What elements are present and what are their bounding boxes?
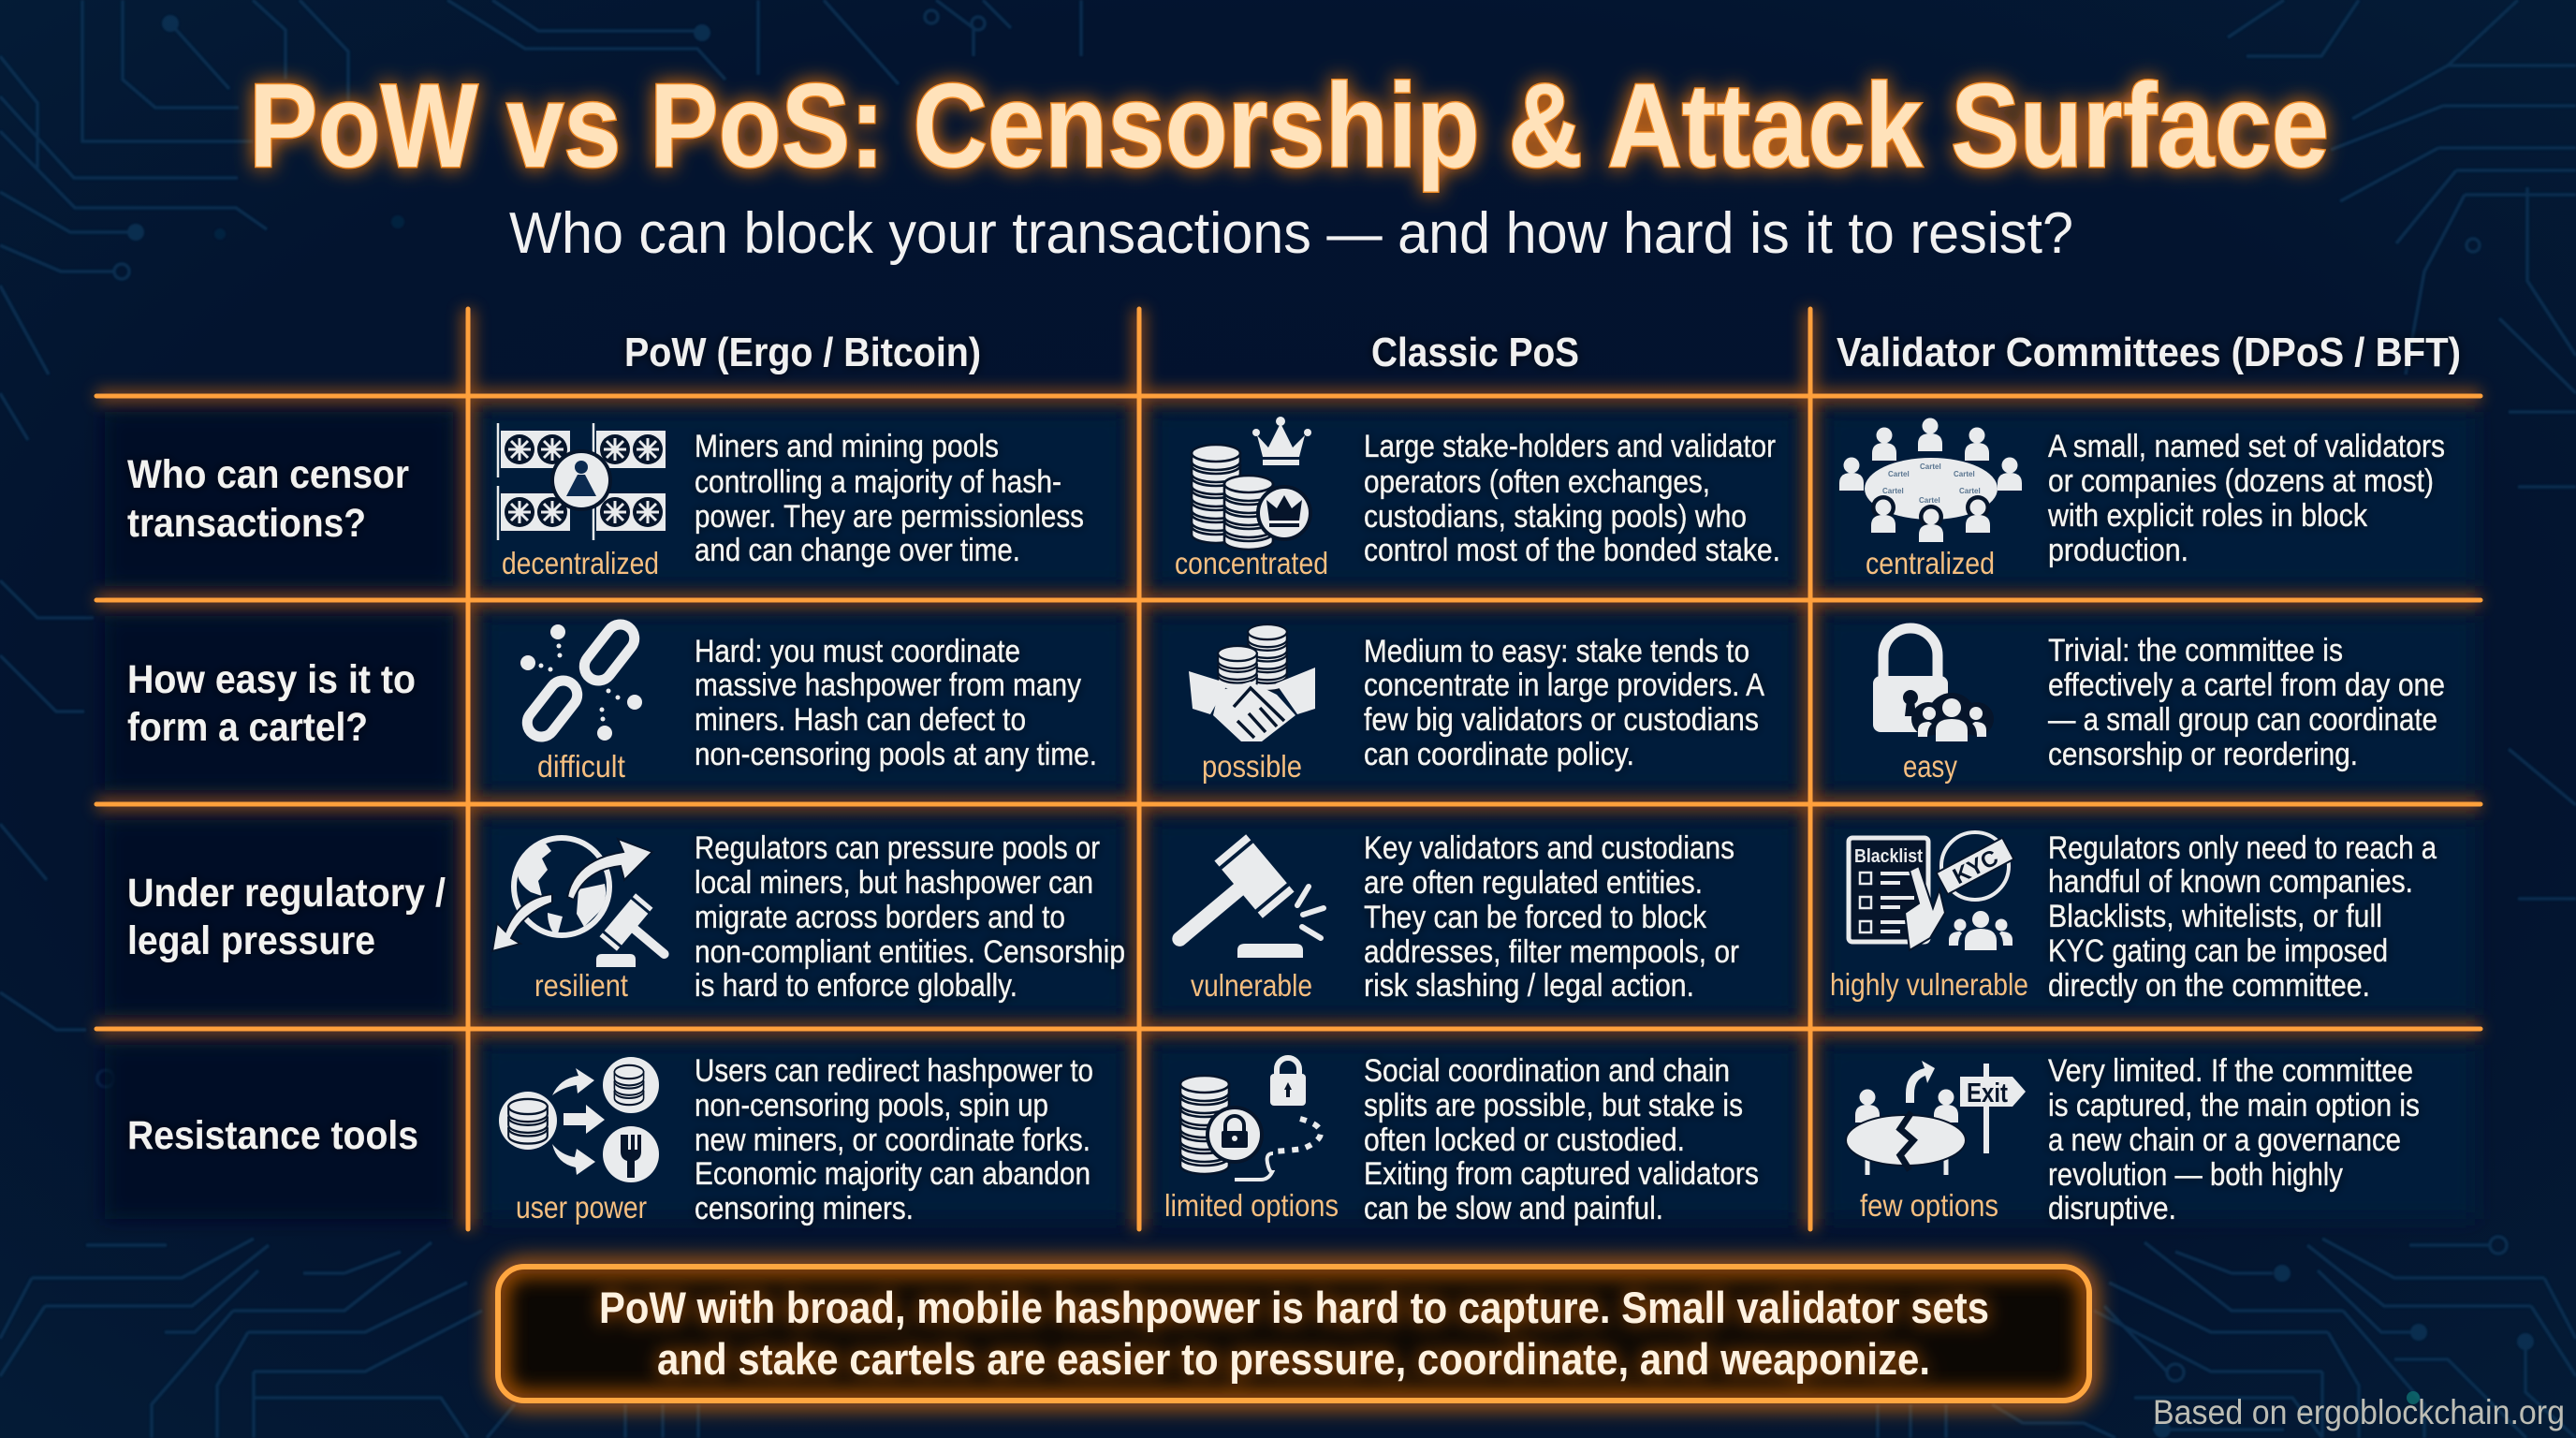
panel: PoW regulatory [492,830,1125,1004]
text: directly on the committee. [2048,968,2370,1004]
text: are often regulated entities. [1364,865,1703,901]
text: censorship or reordering. [2048,737,2358,772]
row labels: Resistance tools [127,1113,418,1158]
text [1364,634,1764,772]
text: concentrate in large providers. A [1364,668,1764,703]
text: Trivial: the committee is [2048,633,2343,668]
icon: broken chain [520,619,642,742]
row labels: legal pressure [127,918,375,963]
icon: committee around table: Cartel [1954,470,1975,478]
text: power. They are permissionless [695,499,1084,535]
text: A small, named set of validators [2048,429,2445,464]
text [695,830,1125,1004]
tag: vulnerable [1191,968,1312,1003]
tag: possible [1202,749,1302,784]
text: is captured, the main option is [2048,1088,2420,1123]
panel: Classic PoS cartel [1189,624,1764,784]
icon: gavel [1149,834,1324,973]
text [2048,830,2437,1004]
icon: globe with arrows and gavel [492,838,686,978]
panel: PoW who can censor [498,423,1084,580]
grid lines [96,309,2481,1229]
icon: committee around table: Cartel [1888,470,1910,478]
text: addresses, filter mempools, or [1364,934,1739,970]
icon: locked coins with dotted exit path [1180,1058,1321,1180]
text: miners. Hash can defect to [695,702,1026,738]
row labels [127,452,446,1158]
text: Users can redirect hashpower to [695,1053,1093,1089]
icon: committee around table: Cartel [1920,462,1941,471]
text [2048,633,2445,772]
panel: committees who can censor [1839,418,2445,580]
row labels: Under regulatory / [127,871,446,916]
text: operators (often exchanges, [1364,464,1710,500]
icon: committee around table: Cartel [1959,487,1981,495]
callout: conclusion box [498,1267,2089,1401]
text: control most of the bonded stake. [1364,533,1780,568]
text: new miners, or coordinate forks. [695,1123,1090,1158]
text: censoring miners. [695,1191,914,1226]
icon: blacklist, KYC stamp and group [1849,832,2014,950]
icon: broken table and exit sign: Exit [1967,1078,2008,1108]
column headers: PoW (Ergo / Bitcoin) [624,330,981,375]
text: and can change over time. [695,533,1020,568]
text: with explicit roles in block [2047,498,2368,534]
subtitle: Who can block your transactions — and how hard is it to resist? [509,201,2073,266]
text: revolution — both highly [2048,1157,2343,1193]
row labels: Who can censor [127,452,409,497]
tag: concentrated [1175,546,1328,580]
text: Exiting from captured validators [1364,1156,1759,1192]
text: non-compliant entities. Censorship [695,934,1125,970]
tag: user power [516,1190,647,1225]
text: local miners, but hashpower can [695,865,1093,901]
icon: committee around table [1839,418,2022,542]
icon: broken table and exit sign [1846,1061,2026,1175]
panel: PoW resistance [499,1053,1093,1226]
text: few big validators or custodians [1364,702,1759,738]
panel: committees resistance [1846,1053,2420,1226]
icon: padlock with group [1873,628,1994,741]
text: Regulators can pressure pools or [695,830,1100,866]
icon: blacklist, KYC stamp and group: KYC [1949,845,2002,889]
panel: PoW cartel [520,619,1097,784]
teal node glow [2407,1391,2420,1404]
tag: decentralized [502,546,659,580]
icon: coins, arrows and fork [499,1057,659,1182]
text [1364,830,1739,1004]
tag: difficult [537,749,625,784]
panel: committees cartel [1873,628,2445,784]
text: Blacklists, whitelists, or full [2048,899,2382,934]
text: They can be forced to block [1364,900,1707,935]
tag: highly vulnerable [1830,967,2028,1002]
icon: committee around table: Cartel [1882,487,1904,495]
text: splits are possible, but stake is [1364,1088,1743,1123]
text: is hard to enforce globally. [695,968,1017,1004]
text: often locked or custodied. [1364,1123,1685,1158]
text [1364,1053,1759,1226]
column headers: Classic PoS [1371,330,1579,375]
panel: Classic PoS resistance [1164,1053,1759,1226]
text: handful of known companies. [2048,864,2413,900]
text: migrate across borders and to [695,900,1065,935]
callout: conclusion box: PoW with broad, mobile hashpower is hard to capture. Small validator sets [599,1283,1989,1332]
text: Social coordination and chain [1364,1053,1730,1089]
text: disruptive. [2048,1191,2176,1226]
icon: handshake with coins [1189,624,1315,741]
text [695,1053,1093,1226]
tag: few options [1860,1188,1998,1223]
text: Miners and mining pools [695,429,999,464]
comparison table [96,309,2481,1229]
panel: Classic PoS regulatory [1149,830,1739,1004]
icon: coin stacks and crown [1192,417,1312,550]
text: Key validators and custodians [1364,830,1734,866]
tag: limited options [1164,1188,1339,1223]
panel: committees regulatory [1830,830,2437,1004]
column headers: Validator Committees (DPoS / BFT) [1837,330,2461,375]
grid glow [96,309,2481,1229]
text [1364,429,1780,568]
text: can be slow and painful. [1364,1191,1663,1226]
text: Hard: you must coordinate [695,634,1020,669]
tag: resilient [534,968,628,1003]
text: — a small group can coordinate [2048,702,2437,738]
text [695,429,1084,568]
text: Economic majority can abandon [695,1156,1090,1192]
text: a new chain or a governance [2048,1123,2401,1158]
row labels: form a cartel? [127,705,368,750]
text: non-censoring pools, spin up [695,1088,1048,1123]
text: KYC gating can be imposed [2048,933,2388,969]
text: Very limited. If the committee [2048,1053,2413,1089]
text [2047,429,2445,568]
text: Large stake-holders and validator [1364,429,1776,464]
row labels: transactions? [127,501,366,546]
panel: Classic PoS who can censor [1175,417,1780,580]
row labels: How easy is it to [127,657,416,702]
text: custodians, staking pools) who [1364,499,1747,535]
icon: committee around table: Cartel [1919,496,1940,505]
text: controlling a majority of hash- [695,464,1061,500]
text: non-censoring pools at any time. [695,737,1097,772]
tag: easy [1903,749,1957,784]
text: Medium to easy: stake tends to [1364,634,1749,669]
icon: blacklist, KYC stamp and group: Blacklist [1854,846,1923,867]
tag: centralized [1866,546,1995,580]
text: Regulators only need to reach a [2048,830,2437,866]
text: production. [2048,533,2188,568]
text: massive hashpower from many [695,668,1081,703]
text: risk slashing / legal action. [1364,968,1694,1004]
column headers [624,330,2461,375]
text [695,634,1097,772]
text [2048,1053,2420,1226]
icon: GPUs with operator [498,423,666,540]
text: effectively a cartel from day one [2048,668,2445,703]
callout: conclusion box: and stake cartels are easier to pressure, coordinate, and weaponize. [657,1334,1930,1384]
text: or companies (dozens at most) [2048,463,2434,499]
text: can coordinate policy. [1364,737,1634,772]
